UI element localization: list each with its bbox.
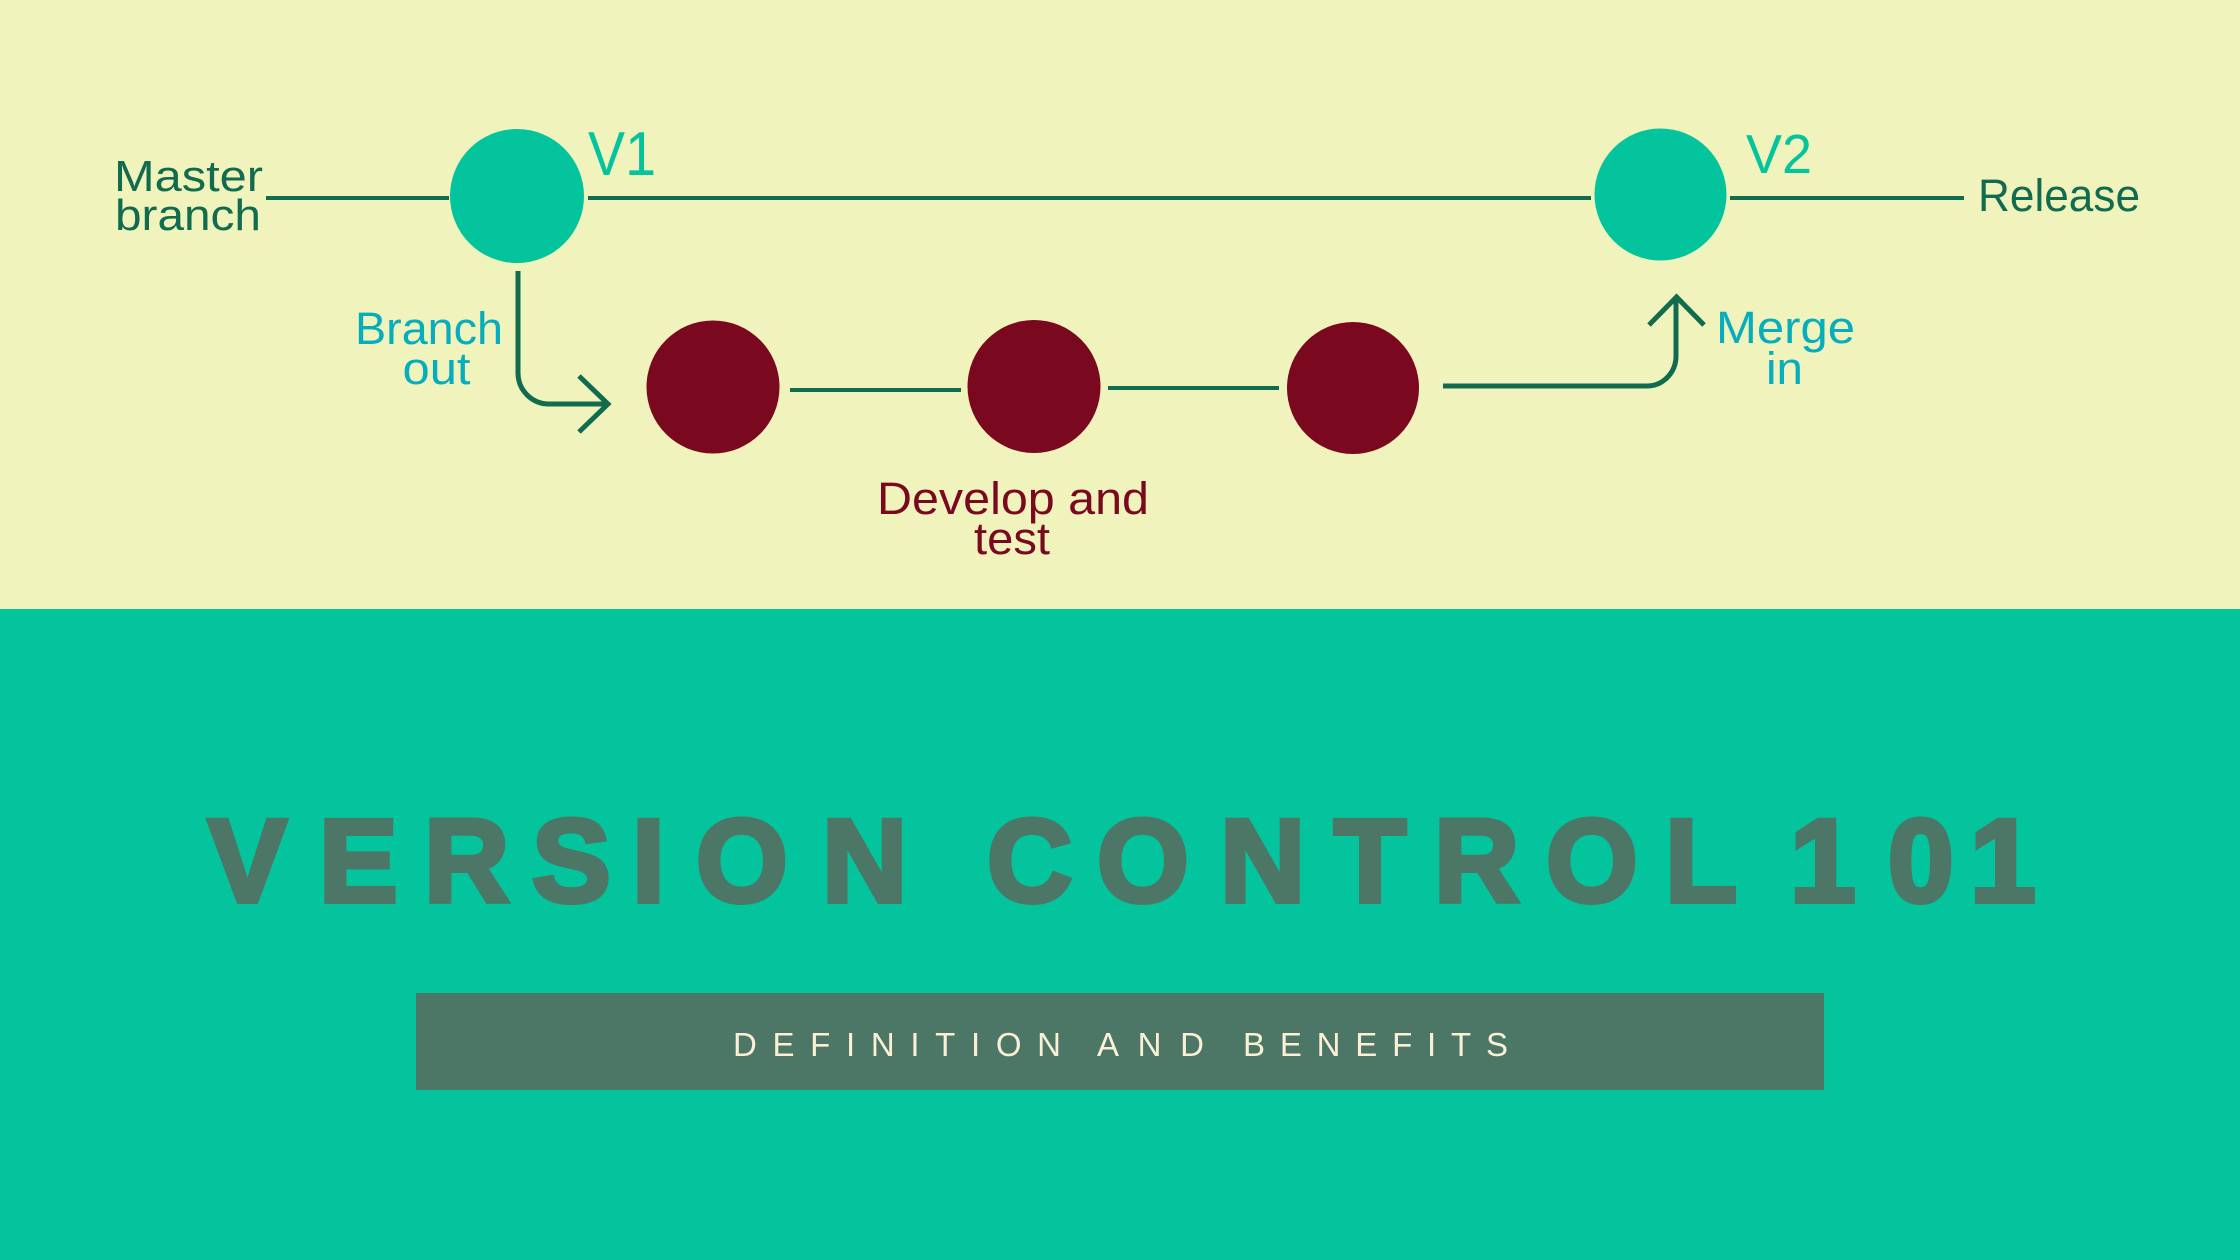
subtitle: AND: [1097, 1026, 1204, 1063]
subtitle: [733, 1026, 1508, 1063]
label: develop and test: test: [974, 513, 1051, 564]
label: merge in: [1716, 302, 1855, 394]
label: merge in: Merge: [1716, 302, 1855, 353]
title: VERSION CONTROL 101: [208, 796, 2036, 928]
panel: branching diagram: [0, 0, 2240, 609]
development line: [790, 388, 1279, 390]
label: V2: V2: [1746, 123, 1812, 185]
master branch line: [266, 196, 1964, 200]
node: develop commit 3: [1287, 322, 1419, 454]
node: develop commit 2: [968, 320, 1100, 453]
node: V1: [450, 129, 584, 263]
label: branch out: out: [402, 343, 471, 394]
label: develop and test: [877, 473, 1149, 564]
label: branch out: Branch: [355, 303, 503, 354]
node: V2: [1594, 128, 1726, 260]
label: master branch: branch: [115, 191, 261, 240]
subtitle: BENEFITS: [1243, 1026, 1508, 1063]
panel: title area: [0, 609, 2240, 1260]
label: V1: V1: [588, 120, 656, 189]
label: develop and test: Develop and: [877, 473, 1149, 524]
subtitle banner: [416, 993, 1824, 1090]
label: master branch: Master: [114, 152, 263, 201]
label: merge in: in: [1766, 343, 1803, 394]
label: release: Release: [1978, 170, 2140, 221]
arrow: merge in: [1443, 297, 1704, 386]
arrow: branch out: [518, 271, 608, 432]
label: master branch: [114, 152, 263, 240]
label: branch out: [355, 303, 503, 394]
node: develop commit 1: [646, 320, 780, 454]
subtitle: DEFINITION: [733, 1026, 1061, 1063]
